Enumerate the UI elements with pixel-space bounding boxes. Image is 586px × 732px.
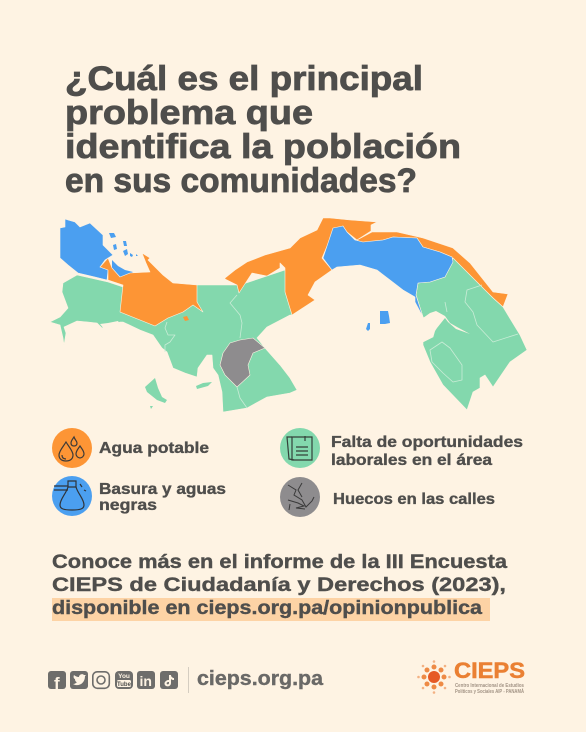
icon: tiktok (160, 671, 178, 689)
divider (188, 667, 189, 693)
icon: garbage bag (52, 476, 92, 516)
icon: water drops (52, 428, 92, 468)
icon: notes (280, 428, 320, 468)
region: Bocas strip (blue) (112, 260, 133, 278)
callout highlight (52, 598, 490, 621)
label: Basura y aguas negras: negras (99, 497, 157, 514)
region: Colon and Panama Oeste (orange) (225, 218, 377, 315)
icon: instagram (93, 672, 109, 688)
call to action text (52, 551, 507, 619)
region: Gulf of Chiriqui islets (100, 321, 120, 331)
region: Bocas del Toro (blue) (60, 219, 113, 280)
legend: Huecos en las calles (280, 477, 495, 517)
social icons (48, 671, 178, 693)
icon: twitter (70, 671, 88, 689)
region: Guna Yala coast (orange) (357, 232, 508, 307)
legend: Basura y aguas negras (52, 476, 226, 516)
region: Gulf of San Miguel inlet (423, 311, 470, 334)
CIEPS logo (417, 658, 525, 695)
title (65, 60, 461, 200)
call to action text: CIEPS de Ciudadanía y Derechos (2023), (52, 574, 506, 596)
label: Falta de oportunidades: Falta de oportunidades (331, 434, 523, 451)
title: problema que (65, 94, 313, 132)
icon: youtube: Tube (117, 682, 132, 688)
region: Bocas islands (blue) (109, 233, 138, 257)
region: Darien (green) (416, 258, 527, 410)
call to action text: disponible en cieps.org.pa/opinionpublica (52, 597, 482, 619)
logo name: CIEPS (454, 658, 525, 683)
logo subtitle (455, 683, 524, 695)
label: Falta de oportunidades: laborales en el área (331, 452, 492, 469)
map of Panama (50, 218, 527, 412)
label: Basura y aguas negras (99, 481, 226, 514)
icon: youtube: You (118, 673, 130, 680)
region: small Veraguas isle (green) (196, 382, 212, 389)
label: Basura y aguas negras: Basura y aguas (99, 481, 226, 498)
label: Huecos en las calles: Huecos en las calles (333, 491, 495, 508)
title: identifica la población (65, 128, 461, 166)
legend: Falta de oportunidades (280, 428, 523, 469)
icon: youtube (115, 671, 133, 689)
label: Falta de oportunidades (331, 434, 523, 469)
icon: road cracks (280, 477, 320, 517)
label: Agua potable: Agua potable (99, 440, 209, 457)
title: ¿Cuál es el principal (65, 60, 423, 98)
region: district lines (165, 285, 518, 408)
region: western and central provinces (green) (50, 270, 297, 412)
region: Ngabe-Bugle (orange) (100, 253, 203, 326)
legend: Agua potable (52, 428, 209, 468)
logo subtitle: Centro Internacional de Estudios (455, 683, 524, 689)
icon: facebook: f (54, 674, 60, 693)
region: Herrera (gray) (220, 338, 265, 387)
call to action text: Conoce más en el informe de la III Encuesta (52, 551, 507, 573)
website: cieps.org.pa (197, 668, 324, 690)
region: Panama province (blue) (323, 226, 453, 317)
region: Pearl islands (blue) (366, 311, 390, 331)
title: en sus comunidades? (65, 162, 417, 200)
icon: sun mark (417, 660, 451, 694)
region: small orange lake (183, 316, 189, 321)
icon: linkedin: in (140, 673, 152, 689)
region: Coiba island (green) (145, 378, 167, 409)
logo subtitle: Políticos y Sociales AIP - PANAMÁ (455, 688, 524, 695)
